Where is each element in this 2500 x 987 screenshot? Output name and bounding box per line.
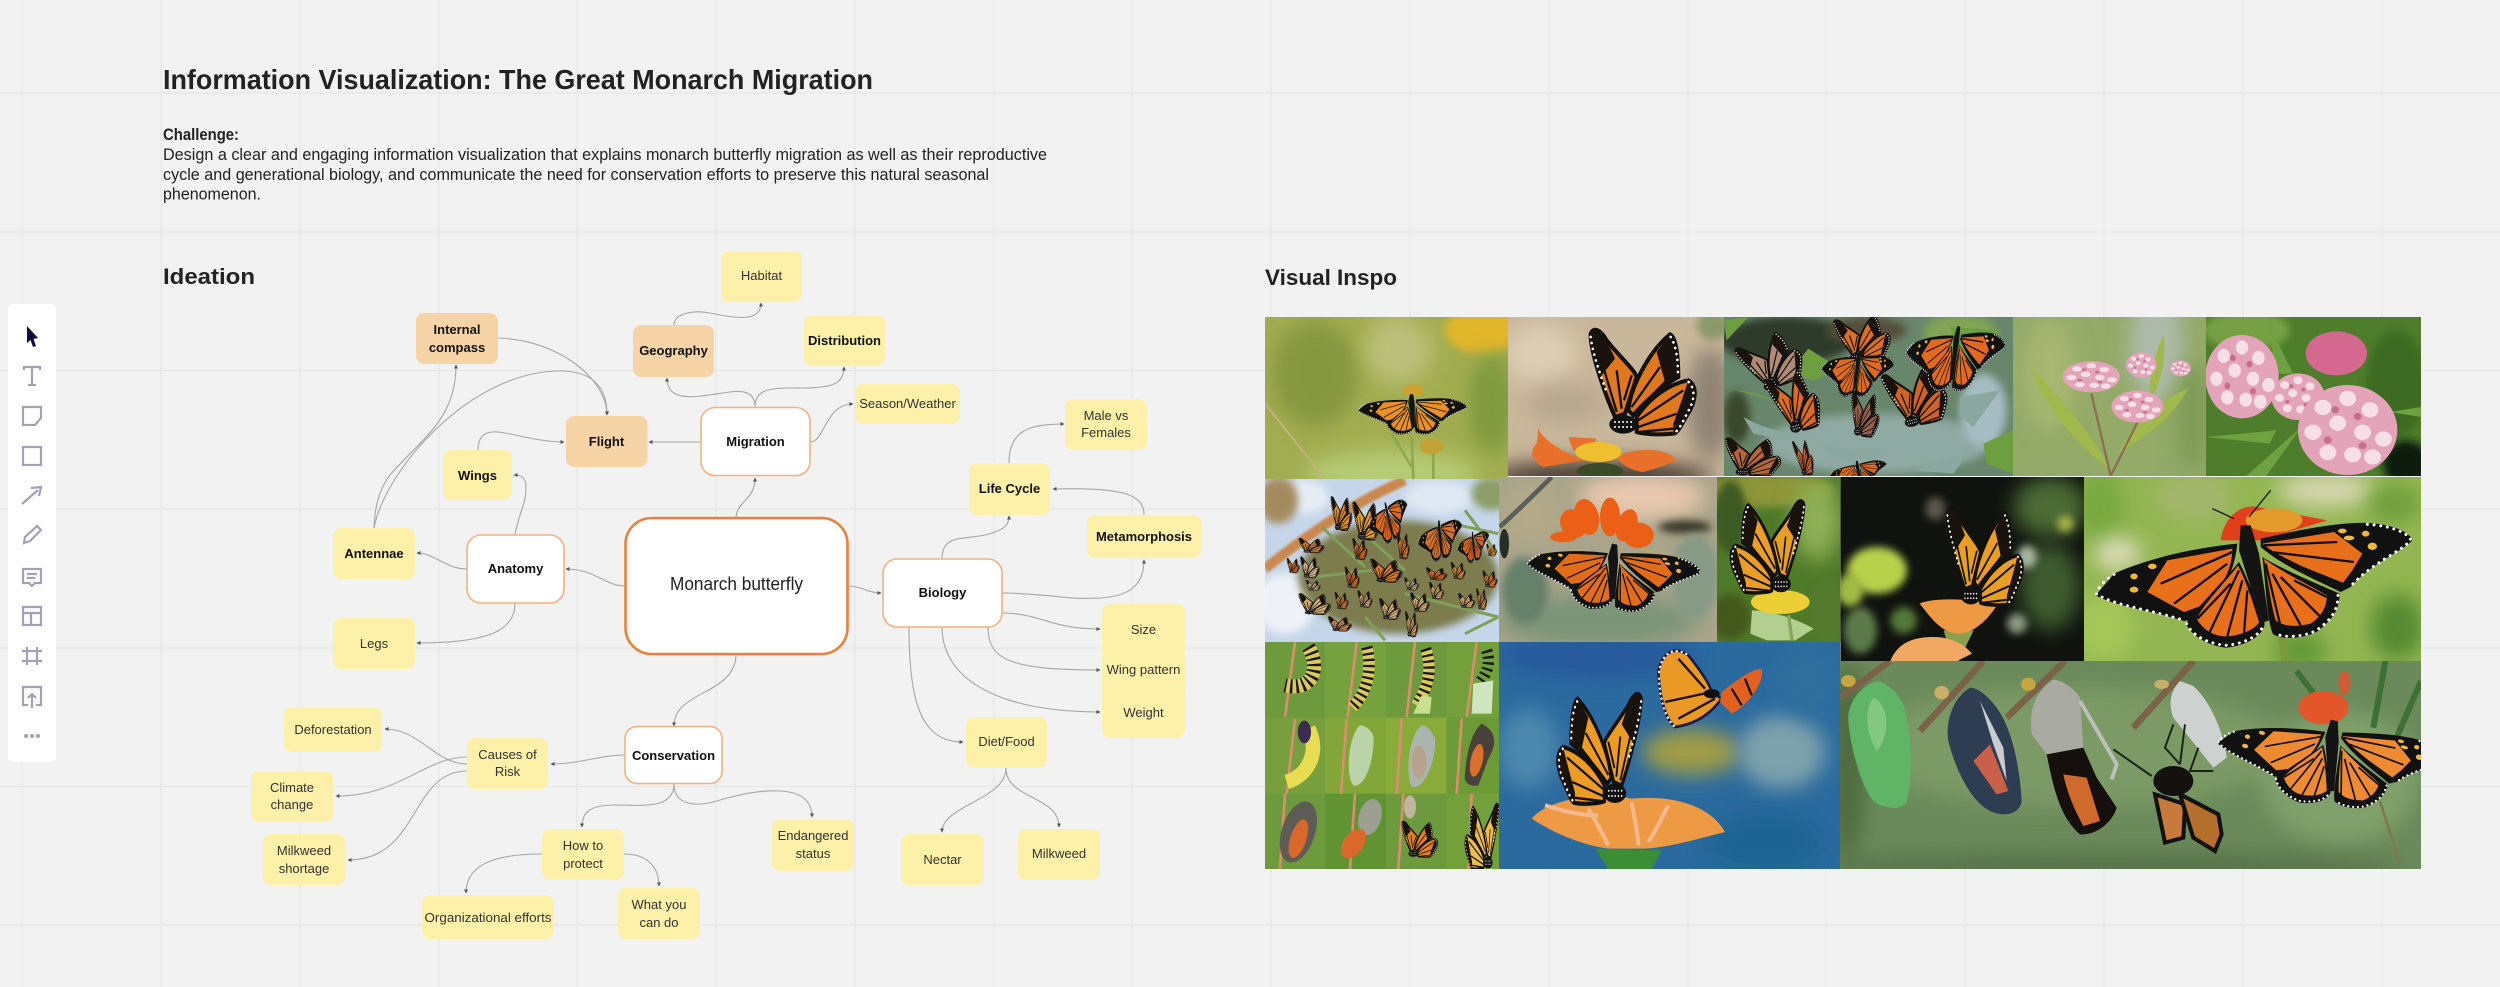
- photo: large monarch on red flower: [2084, 477, 2421, 661]
- node: Milkweed: [1018, 829, 1100, 880]
- challenge text block: cycle and generational biology, and communicate the need for conservation efforts to preserve this natural seasonal: [163, 166, 989, 184]
- node: Geography: [633, 325, 714, 377]
- photo: caterpillar to butterfly stages grid: [1265, 642, 1499, 869]
- node: Distribution: [804, 315, 885, 366]
- photo: chrysalis to butterfly sequence: [1840, 661, 2421, 869]
- node: How to protect: [542, 829, 624, 880]
- node: Nectar: [901, 834, 984, 885]
- icon: comment: [23, 569, 41, 586]
- challenge text block: Design a clear and engaging information visualization that explains monarch butterfly migration as well as their reproductive: [163, 146, 1047, 164]
- node: Internal compass: Internal: [434, 322, 480, 337]
- node: Deforestation: [284, 707, 382, 752]
- node: Metamorphosis: [1087, 515, 1201, 558]
- photo: monarch on yellow flower: [1265, 317, 1508, 479]
- node: Monarch butterfly: [626, 518, 848, 654]
- node: What you can do: can do: [639, 915, 679, 930]
- icon: rectangle: [23, 447, 41, 465]
- node: Season/Weather: [855, 384, 960, 424]
- node: Climate change: Climate: [270, 780, 314, 795]
- node: Flight: [566, 416, 648, 467]
- icon: template: [23, 607, 41, 625]
- node: Biology: [883, 559, 1002, 627]
- node: Milkweed: Milkweed: [1032, 846, 1086, 861]
- node: Wings: Wings: [458, 468, 497, 483]
- icon: more: [24, 734, 40, 738]
- node: Wing pattern: Wing pattern: [1107, 662, 1180, 677]
- node: Distribution: Distribution: [808, 333, 881, 348]
- photo: milkweed pale pink: [2013, 317, 2206, 476]
- node: Migration: Migration: [726, 434, 785, 449]
- photo: milkweed bright pink: [2206, 317, 2421, 476]
- node: Anatomy: Anatomy: [488, 561, 544, 576]
- heading: visual inspo: Visual Inspo: [1265, 265, 1397, 290]
- node: Size: Size: [1131, 622, 1156, 637]
- node: Legs: Legs: [360, 636, 389, 651]
- icon: sticky note: [23, 407, 41, 425]
- node: Weight: Weight: [1123, 705, 1164, 720]
- node: Internal compass: [416, 313, 498, 364]
- photo: painted monarchs on blue background: [1498, 632, 1840, 872]
- mind map nodes: [251, 251, 1201, 939]
- node: Milkweed shortage: shortage: [279, 861, 329, 876]
- node: Conservation: [625, 726, 722, 784]
- node: Geography: Geography: [639, 343, 709, 358]
- icon: upload: [23, 687, 41, 708]
- node: Weight: [1102, 688, 1185, 738]
- node: Deforestation: Deforestation: [294, 722, 372, 737]
- node: Size: [1102, 604, 1185, 656]
- node: What you can do: [618, 888, 700, 939]
- node: How to protect: protect: [563, 856, 603, 871]
- node: Habitat: Habitat: [741, 268, 782, 283]
- photo: monarch cluster on pine: [1255, 477, 1512, 642]
- node: What you can do: What you: [632, 897, 686, 912]
- node: Causes of Risk: Risk: [495, 764, 521, 779]
- node: Milkweed shortage: [263, 834, 345, 885]
- mind map connectors: [336, 303, 1144, 893]
- heading: ideation: Ideation: [163, 264, 255, 289]
- node: Climate change: [251, 771, 333, 822]
- node: Organizational efforts: [422, 895, 554, 939]
- photo: monarch group on silver leaves: [1724, 317, 2013, 476]
- node: Monarch butterfly: Monarch butterfly: [670, 574, 803, 594]
- node: Climate change: change: [271, 797, 313, 812]
- challenge text block: [163, 126, 1047, 204]
- node: Endangered status: status: [796, 846, 831, 861]
- icon: arrow: [22, 487, 41, 504]
- node: Biology: Biology: [919, 585, 967, 600]
- photo: monarch on dark background: [1837, 477, 2087, 661]
- node: Causes of Risk: Causes of: [478, 747, 537, 762]
- node: Season/Weather: Season/Weather: [859, 396, 956, 411]
- node: Male vs Females: [1065, 399, 1147, 450]
- node: Milkweed shortage: Milkweed: [277, 843, 331, 858]
- photo: monarch side view on orange flower: [1508, 317, 1724, 476]
- node: Causes of Risk: [467, 738, 548, 789]
- node: Legs: [333, 618, 415, 669]
- icon: frame: [22, 647, 42, 665]
- node: Male vs Females: Male vs: [1084, 408, 1129, 423]
- node: Endangered status: [772, 819, 854, 871]
- node: Metamorphosis: Metamorphosis: [1096, 529, 1192, 544]
- node: Diet/Food: [966, 717, 1047, 768]
- icon: text: [24, 367, 40, 385]
- challenge text block: phenomenon.: [163, 186, 261, 204]
- node: Wing pattern: [1102, 647, 1185, 698]
- node: Organizational efforts: Organizational efforts: [424, 910, 552, 925]
- node: Antennae: [333, 528, 415, 579]
- node: How to protect: How to: [563, 838, 603, 853]
- node: Nectar: Nectar: [923, 852, 962, 867]
- node: Life Cycle: [969, 463, 1050, 515]
- node: Diet/Food: Diet/Food: [978, 734, 1035, 749]
- toolbar: [8, 304, 56, 762]
- node: Conservation: Conservation: [632, 748, 715, 763]
- photo: monarch side view on yellow flower: [1717, 477, 1840, 642]
- node: Habitat: [721, 251, 802, 302]
- photo collage: [1265, 317, 2421, 869]
- photo: monarch open wings on orange flower: [1498, 474, 1718, 647]
- icon: pen: [24, 526, 41, 543]
- node: Endangered status: Endangered: [778, 828, 848, 843]
- title: Information Visualization: The Great Monarch Migration: [163, 64, 873, 95]
- node: Flight: Flight: [589, 434, 625, 449]
- node: Anatomy: [467, 535, 564, 603]
- node: Migration: [701, 408, 810, 476]
- node: Internal compass: compass: [429, 340, 485, 355]
- node: Male vs Females: Females: [1081, 425, 1131, 440]
- node: Wings: [443, 450, 512, 500]
- node: Antennae: Antennae: [344, 546, 404, 561]
- icon: cursor: [27, 326, 38, 347]
- challenge text block: Challenge:: [163, 126, 239, 144]
- node: Life Cycle: Life Cycle: [979, 481, 1040, 496]
